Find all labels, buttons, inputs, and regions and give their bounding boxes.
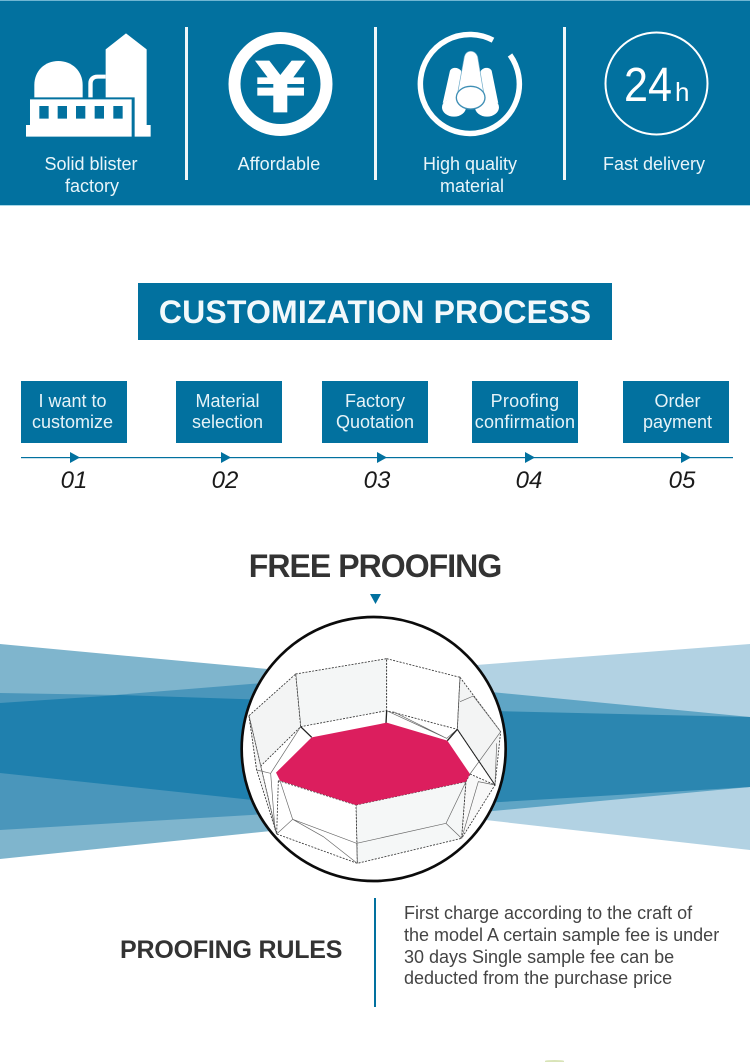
background light rays	[0, 644, 750, 859]
icon: 24h delivery	[604, 32, 708, 136]
arrow: down marker	[370, 594, 381, 604]
label: affordable: Affordable	[238, 154, 320, 174]
product illustration: octagonal box in circle	[240, 616, 507, 882]
step number 02: 02	[212, 467, 238, 494]
proofing rules text	[404, 903, 719, 988]
box side panels	[249, 659, 501, 863]
heading: free proofing: FREE PROOFING	[249, 548, 501, 584]
proofing rules text: 30 days Single sample fee can be	[404, 947, 674, 967]
label: fast delivery: Fast delivery	[603, 154, 705, 174]
magenta box base	[276, 723, 470, 805]
step number 03: 03	[364, 467, 390, 494]
label: high quality material	[423, 154, 517, 196]
proofing rules text: First charge according to the craft of	[404, 903, 692, 923]
proofing rules text: the model A certain sample fee is under	[404, 925, 719, 945]
step 5	[623, 381, 729, 443]
step 2: selection	[192, 412, 263, 432]
step 1	[21, 381, 127, 443]
step 4: Proofing	[491, 390, 559, 410]
step 1: customize	[32, 412, 113, 432]
proofing rules text: deducted from the purchase price	[404, 968, 672, 988]
step 2: Material	[195, 390, 260, 410]
step 5: payment	[643, 412, 712, 432]
step 2	[176, 381, 282, 443]
icon: 24h delivery: 24	[624, 59, 672, 112]
step number 01: 01	[61, 467, 87, 494]
circle frame	[242, 617, 506, 881]
step 5: Order	[654, 390, 700, 410]
top banner	[0, 0, 750, 206]
step 3: Factory	[345, 390, 405, 410]
icon: 24h delivery: h	[675, 77, 689, 107]
process timeline arrows	[21, 452, 733, 463]
step 1: I want to	[38, 390, 107, 410]
heading: customization process	[138, 283, 612, 340]
label: high quality material: High quality	[423, 154, 517, 174]
label: high quality material: material	[440, 176, 504, 196]
label: solid blister factory: factory	[65, 176, 119, 196]
step 4: confirmation	[475, 412, 575, 432]
label: solid blister factory	[44, 154, 138, 196]
box fold lines	[249, 677, 501, 863]
label: solid blister factory: Solid blister	[44, 154, 138, 174]
icon: factory	[26, 33, 151, 137]
step number 04: 04	[516, 467, 542, 494]
bottom edge speck	[545, 1060, 564, 1062]
step 3: Quotation	[336, 412, 414, 432]
heading: customization process: CUSTOMIZATION PROCESS	[159, 294, 591, 330]
vertical divider	[374, 898, 376, 1007]
icon: yen coin	[228, 32, 332, 136]
step number 05: 05	[669, 467, 695, 494]
heading: proofing rules: PROOFING RULES	[120, 936, 342, 964]
icon: material rolls	[418, 32, 522, 136]
step 3	[322, 381, 428, 443]
step 4	[472, 381, 578, 443]
